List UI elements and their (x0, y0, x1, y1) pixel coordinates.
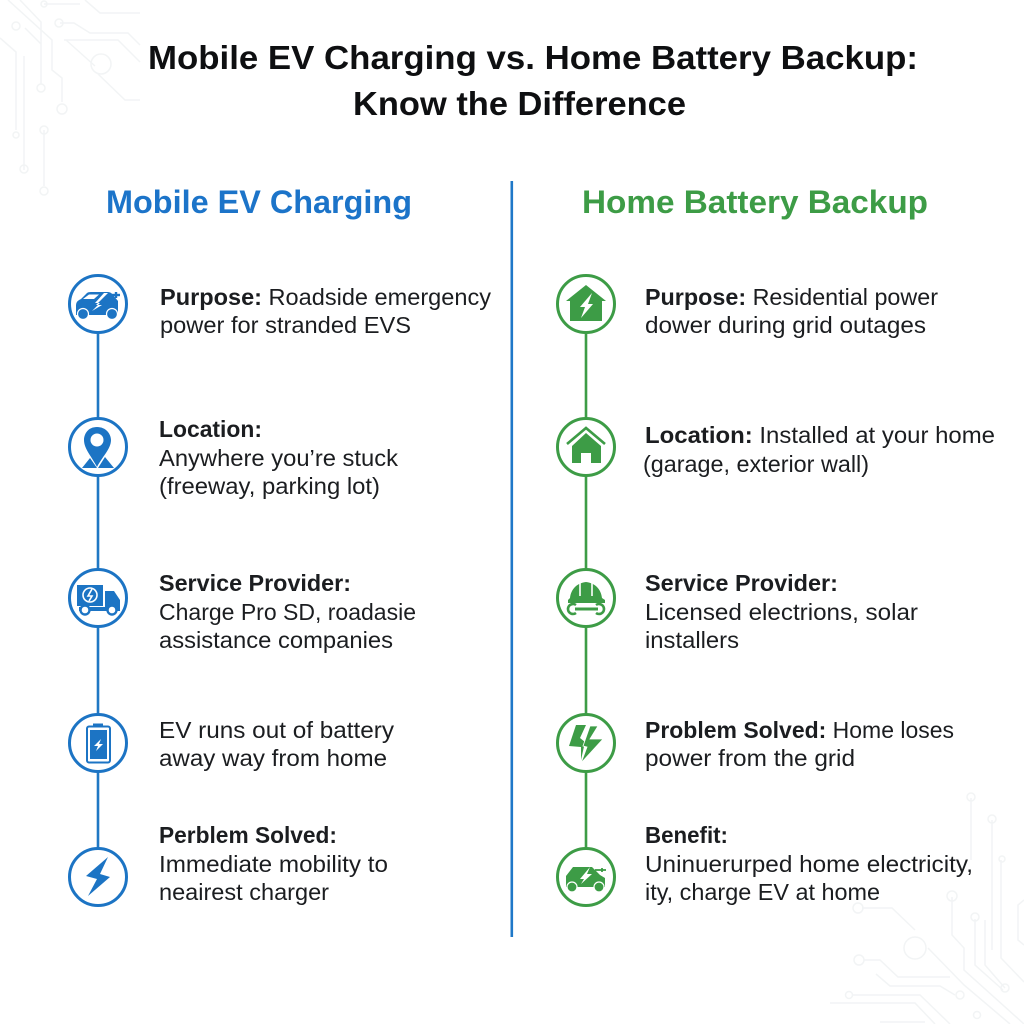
timeline line: blue (97, 333, 99, 848)
text: purpose: dower during grid outages (645, 312, 926, 338)
icon: service truck (70, 570, 126, 626)
text: location: (freeway, parking lot) (159, 473, 380, 499)
text: problem: away way from home (159, 745, 387, 771)
icon: car with charge (70, 276, 126, 332)
text: service provider (645, 570, 918, 653)
text: problem solved: Problem Solved: Home loses (645, 717, 954, 743)
text: problem solved (645, 717, 954, 771)
panel: Home Battery Backup (558, 184, 995, 906)
text: benefit: neairest charger (159, 879, 329, 905)
title: Know the Difference (353, 85, 686, 122)
icon: house with bolt (558, 276, 614, 332)
text: benefit: Benefit: (645, 822, 728, 848)
text: service provider (159, 570, 416, 653)
text: purpose: Purpose: Residential power (645, 284, 938, 310)
text: location: (garage, exterior wall) (643, 451, 869, 477)
text: purpose: Purpose: Roadside emergency (160, 284, 492, 310)
text: purpose: power for stranded EVS (160, 312, 411, 338)
text: service provider: Licensed electrions, solar (645, 599, 918, 625)
text: service provider: Service Provider: (645, 570, 838, 596)
title (148, 39, 918, 122)
timeline line: green (585, 333, 587, 848)
text: benefit: Perblem Solved: (159, 822, 337, 848)
heading: Mobile EV Charging: Mobile EV Charging (106, 184, 412, 220)
text: benefit: Uninuerurped home electricity, (645, 851, 973, 877)
text: location: Anywhere you’re stuck (159, 445, 399, 471)
icon: lightning bolt (70, 848, 126, 906)
text: location (159, 416, 399, 499)
text: benefit: ity, charge EV at home (645, 879, 880, 905)
icon: battery (70, 714, 126, 772)
icon: house (558, 418, 614, 476)
divider between columns (510, 181, 513, 937)
icon: double lightning (558, 714, 614, 772)
icon: hard hat and wrench (558, 570, 614, 626)
title: Mobile EV Charging vs. Home Battery Backup: (148, 39, 918, 76)
text: service provider: installers (645, 627, 739, 653)
text: purpose (160, 284, 492, 338)
text: problem (159, 717, 395, 771)
text: benefit (159, 822, 388, 905)
text: location: Location: Installed at your home (645, 422, 995, 448)
heading: Home Battery Backup: Home Battery Backup (582, 184, 928, 220)
text: problem solved: power from the grid (645, 745, 855, 771)
text: benefit (645, 822, 973, 905)
text: benefit: Immediate mobility to (159, 851, 388, 877)
text: location (643, 422, 995, 477)
icon: EV with bolt (558, 848, 614, 906)
text: problem: EV runs out of battery (159, 717, 395, 743)
text: service provider: Charge Pro SD, roadasie (159, 599, 416, 625)
panel: Mobile EV Charging (70, 184, 492, 906)
text: location: Location: (159, 416, 262, 442)
text: purpose (645, 284, 938, 338)
text: service provider: assistance companies (159, 627, 393, 653)
text: service provider: Service Provider: (159, 570, 351, 596)
icon: location pin (70, 418, 126, 476)
